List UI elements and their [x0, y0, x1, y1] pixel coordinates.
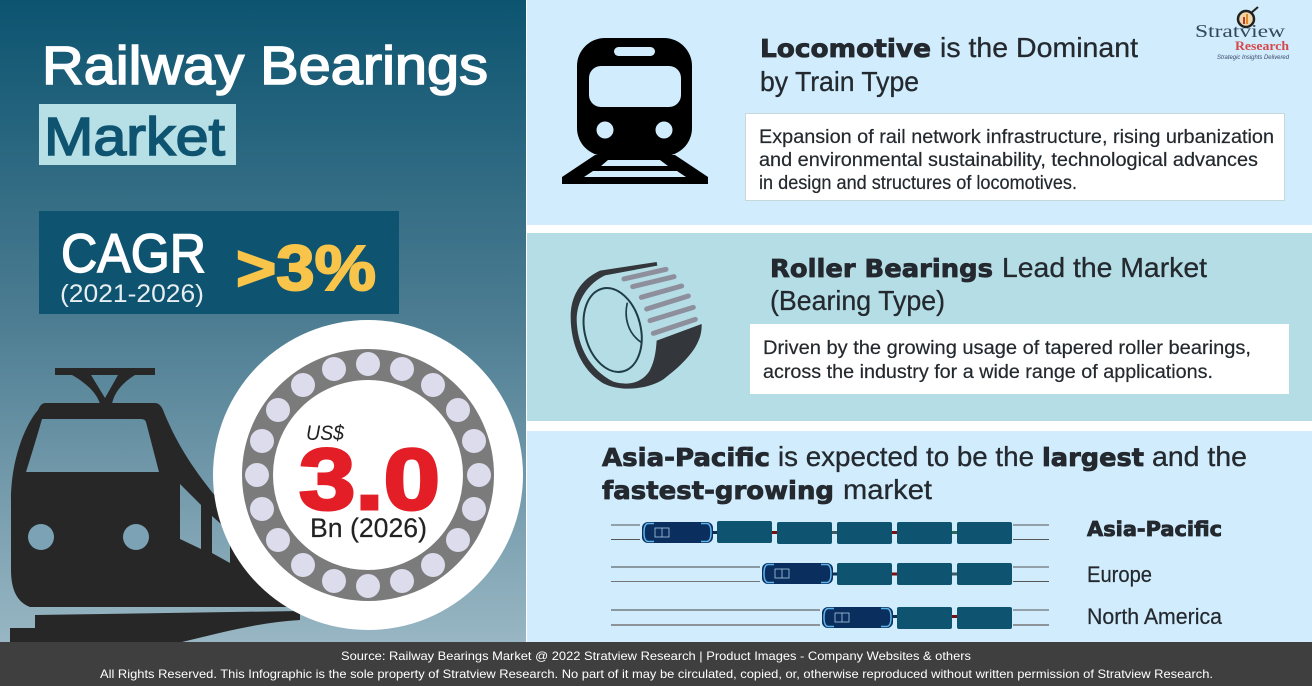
- logo: Stratview Research: Stratview: [1195, 21, 1285, 41]
- chart: bearing market value: US$: [306, 422, 344, 445]
- label: Europe: Europe: [1087, 562, 1152, 587]
- label: Asia-Pacific: Asia-Pacific: [1087, 517, 1222, 541]
- chart: bearing market value: [213, 320, 523, 630]
- heading: locomotive: is the Dominant: [940, 32, 1138, 63]
- text block: roller bearing drivers: [750, 324, 1289, 394]
- heading: locomotive: [760, 32, 1138, 97]
- logo: Stratview Research: Research: [1235, 38, 1290, 53]
- heading: roller bearings: Roller Bearings: [770, 254, 993, 283]
- heading: regional outlook: Asia-Pacific: [602, 443, 770, 472]
- bearing balls: [245, 352, 491, 598]
- footer: All Rights Reserved. This Infographic is the sole property of Stratview Research. No part of it may be circulated, copied, or, otherwise reproduced without written permission of Stratview Research.: [100, 667, 1213, 681]
- icon: magnifier: [1238, 7, 1258, 27]
- chart: bearing market value: 3.0: [299, 432, 440, 528]
- chart: Asia-Pacific train: [611, 521, 1049, 544]
- text block: locomotive drivers: Expansion of rail network infrastructure, rising urbanization: [759, 127, 1274, 148]
- logo: Stratview Research: Strategic Insights Delivered: [1217, 55, 1290, 61]
- chart: bearing market value: Bn (2026): [310, 513, 427, 543]
- text block: locomotive drivers: and environmental sustainability, technological advances: [759, 150, 1258, 171]
- chart: North America train: [611, 607, 1049, 629]
- callout: CAGR: CAGR: [61, 222, 206, 284]
- heading: regional outlook: and the: [1152, 441, 1247, 472]
- heading: regional outlook: largest: [1042, 443, 1144, 472]
- callout: CAGR: [39, 211, 399, 314]
- icon: locomotive front: [562, 38, 708, 184]
- callout: CAGR: (2021-2026): [60, 280, 204, 308]
- heading: regional outlook: fastest-growing: [602, 476, 834, 505]
- heading: locomotive: by Train Type: [760, 66, 919, 97]
- footer: Source: Railway Bearings Market @ 2022 Stratview Research | Product Images - Company Websites & others: [341, 649, 971, 663]
- panel: regional outlook: [527, 431, 1312, 642]
- heading: regional outlook: [602, 441, 1247, 505]
- heading: roller bearings: Lead the Market: [1002, 252, 1207, 283]
- heading: roller bearings: (Bearing Type): [770, 285, 945, 316]
- text block: locomotive drivers: [746, 114, 1284, 200]
- callout: CAGR: >3%: [236, 232, 376, 304]
- heading: regional outlook: market: [843, 474, 932, 505]
- heading: locomotive: Locomotive: [760, 34, 931, 63]
- title: Railway Bearings: Railway Bearings: [42, 36, 488, 96]
- heading: roller bearings: [770, 252, 1207, 316]
- label: North America: North America: [1087, 604, 1223, 629]
- icon: roller bearing: [571, 262, 702, 389]
- text block: roller bearing drivers: across the industry for a wide range of applications.: [763, 362, 1213, 383]
- footer: [0, 642, 1312, 686]
- title: Market highlight: Market: [44, 107, 225, 167]
- icon: train silhouette: [10, 368, 300, 642]
- heading: regional outlook: is expected to be the: [778, 441, 1034, 472]
- chart: Europe train: [611, 563, 1049, 585]
- text block: roller bearing drivers: Driven by the growing usage of tapered roller bearings,: [763, 338, 1251, 359]
- panel: market summary: [0, 0, 526, 642]
- panel: locomotive: [527, 0, 1312, 225]
- logo: Stratview Research: [1195, 7, 1290, 61]
- panel: roller bearings: [527, 233, 1312, 421]
- text block: locomotive drivers: in design and structures of locomotives.: [759, 173, 1077, 194]
